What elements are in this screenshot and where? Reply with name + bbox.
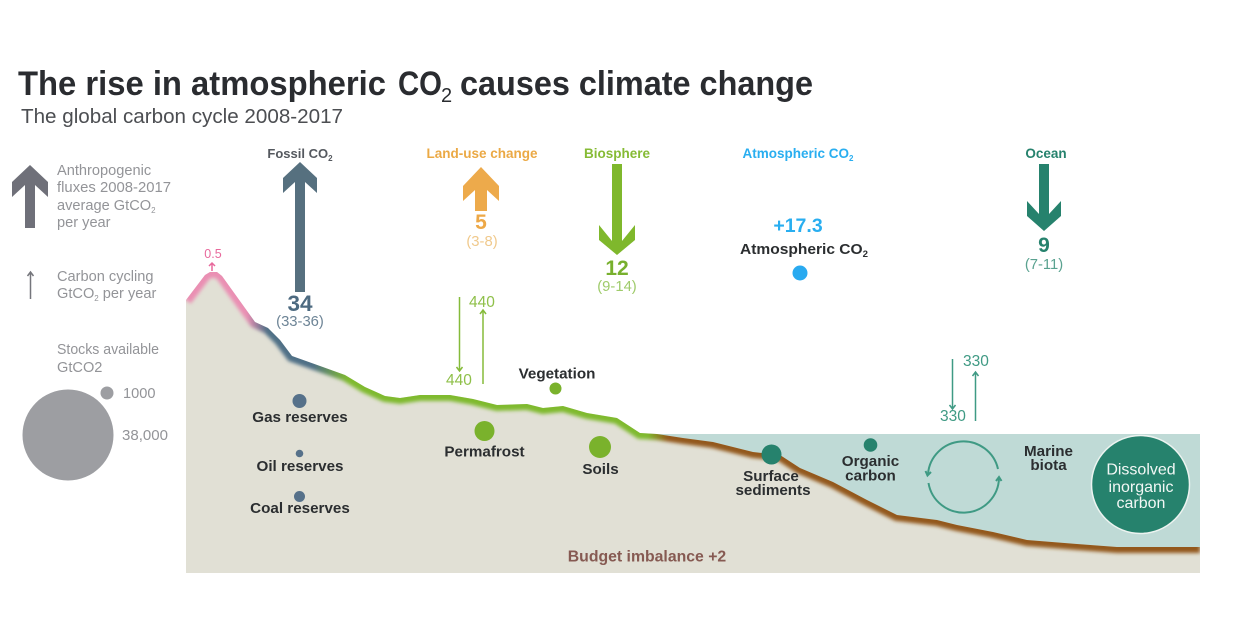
ground (186, 272, 1200, 573)
pink 0.5 flux: 0.5 (204, 247, 222, 261)
stock: marine biota (1024, 443, 1073, 474)
land cycling arrows 440: 440 (469, 294, 495, 311)
stock: dissolved inorganic carbon (1092, 436, 1190, 534)
land cycling arrows 440 (446, 294, 495, 389)
budget imbalance: Budget imbalance +2 (568, 548, 726, 566)
legend: stock circles (22, 342, 168, 480)
icon: ocean circulation arrows (926, 441, 1002, 513)
legend: stock circles: 1000 (123, 386, 155, 402)
title: 2 (441, 85, 452, 107)
value: fossil: 34 (287, 291, 313, 316)
legend: anthropogenic flux arrow: fluxes 2008-2017 (57, 180, 171, 196)
title (18, 65, 813, 107)
value: land-use: 5 (475, 211, 487, 234)
stock: surface sediments: Surface (743, 468, 799, 485)
title: The rise in atmospheric (18, 65, 386, 103)
legend: anthropogenic flux arrow: 2 (151, 206, 156, 215)
arrow: land-use (463, 167, 499, 211)
stock: coal reserves: Coal reserves (250, 500, 350, 517)
ocean (640, 434, 1200, 550)
subtitle: The global carbon cycle 2008-2017 (21, 106, 343, 128)
icon: atmospheric stock dot (792, 266, 808, 280)
ocean cycling arrows 330: 330 (940, 408, 966, 425)
legend: carbon cycling arrow: GtCO (57, 286, 94, 302)
stock: soils (582, 436, 619, 478)
value: atmospheric growth: +17.3 (773, 215, 823, 237)
legend: anthropogenic flux arrow: per year (57, 215, 111, 231)
legend: stock circles: Stocks available (57, 342, 159, 358)
ocean cycling arrows 330 (940, 353, 989, 425)
value: land-use: (3-8) (466, 234, 498, 250)
stock: organic carbon (842, 438, 899, 484)
stock: marine biota: biota (1030, 457, 1067, 474)
heading: biosphere: Biosphere (584, 146, 650, 161)
stock: dissolved inorganic carbon: inorganic (1109, 479, 1173, 496)
stock: oil reserves: Oil reserves (257, 458, 343, 475)
legend: anthropogenic flux arrow: average GtCO (57, 198, 151, 214)
value: fossil (276, 291, 324, 330)
legend: stock circles: GtCO2 (57, 360, 102, 376)
arrow: biosphere (599, 164, 635, 255)
stock: organic carbon: carbon (845, 468, 896, 484)
stock: coal reserves (250, 491, 350, 517)
stock: permafrost (444, 421, 525, 460)
stock: vegetation (519, 366, 595, 394)
land cycling arrows 440: 440 (446, 372, 472, 389)
heading: atmospheric CO2: 2 (849, 154, 854, 163)
heading: atmospheric CO2: Atmospheric CO (743, 146, 849, 161)
arrow: fossil (283, 162, 317, 292)
stock: marine biota: Marine (1024, 443, 1073, 460)
stock: organic carbon: Organic (842, 453, 899, 470)
value: ocean: (7-11) (1025, 257, 1063, 273)
coloured surface band (186, 272, 1200, 547)
value: biosphere: 12 (605, 257, 629, 280)
arrow: ocean (1027, 164, 1061, 231)
stock: vegetation: Vegetation (519, 366, 595, 382)
value: biosphere: (9-14) (597, 279, 637, 295)
heading: Fossil CO2: 2 (328, 154, 333, 163)
heading: Fossil CO2: Fossil CO (267, 146, 328, 161)
value: biosphere (597, 257, 637, 295)
stock: surface sediments (735, 444, 811, 499)
value: ocean: 9 (1038, 234, 1050, 257)
pink 0.5 flux (204, 247, 222, 271)
value: fossil: (33-36) (276, 314, 324, 330)
stock: oil reserves (257, 450, 343, 475)
stock: surface sediments: sediments (735, 482, 811, 499)
legend: carbon cycling arrow: per year (99, 286, 156, 302)
heading: land-use change: Land-use change (426, 146, 538, 161)
legend: anthropogenic flux arrow: Anthropogenic (57, 163, 151, 179)
legend: carbon cycling arrow (28, 269, 156, 303)
value: ocean (1025, 234, 1063, 273)
ground and ocean cross-section (186, 272, 1200, 573)
title: CO (398, 65, 442, 103)
legend: stock circles: 38,000 (122, 428, 168, 444)
value: land-use (466, 211, 498, 250)
heading: ocean: Ocean (1025, 146, 1067, 161)
stock: gas reserves: Gas reserves (252, 409, 348, 426)
label: atmospheric CO2: Atmospheric CO (740, 242, 854, 258)
stock: soils: Soils (582, 461, 619, 478)
legend: carbon cycling arrow: 2 (94, 294, 99, 303)
stock: dissolved inorganic carbon: Dissolved (1106, 462, 1176, 478)
legend: anthropogenic flux arrow (12, 163, 171, 231)
stock: gas reserves (252, 394, 348, 426)
ocean cycling arrows 330: 330 (963, 353, 989, 370)
stock: dissolved inorganic carbon: carbon (1117, 495, 1165, 512)
stock: permafrost: Permafrost (444, 444, 525, 460)
label: atmospheric CO2: 2 (863, 249, 868, 259)
title: causes climate change (460, 65, 813, 103)
legend: carbon cycling arrow: Carbon cycling (57, 269, 154, 285)
